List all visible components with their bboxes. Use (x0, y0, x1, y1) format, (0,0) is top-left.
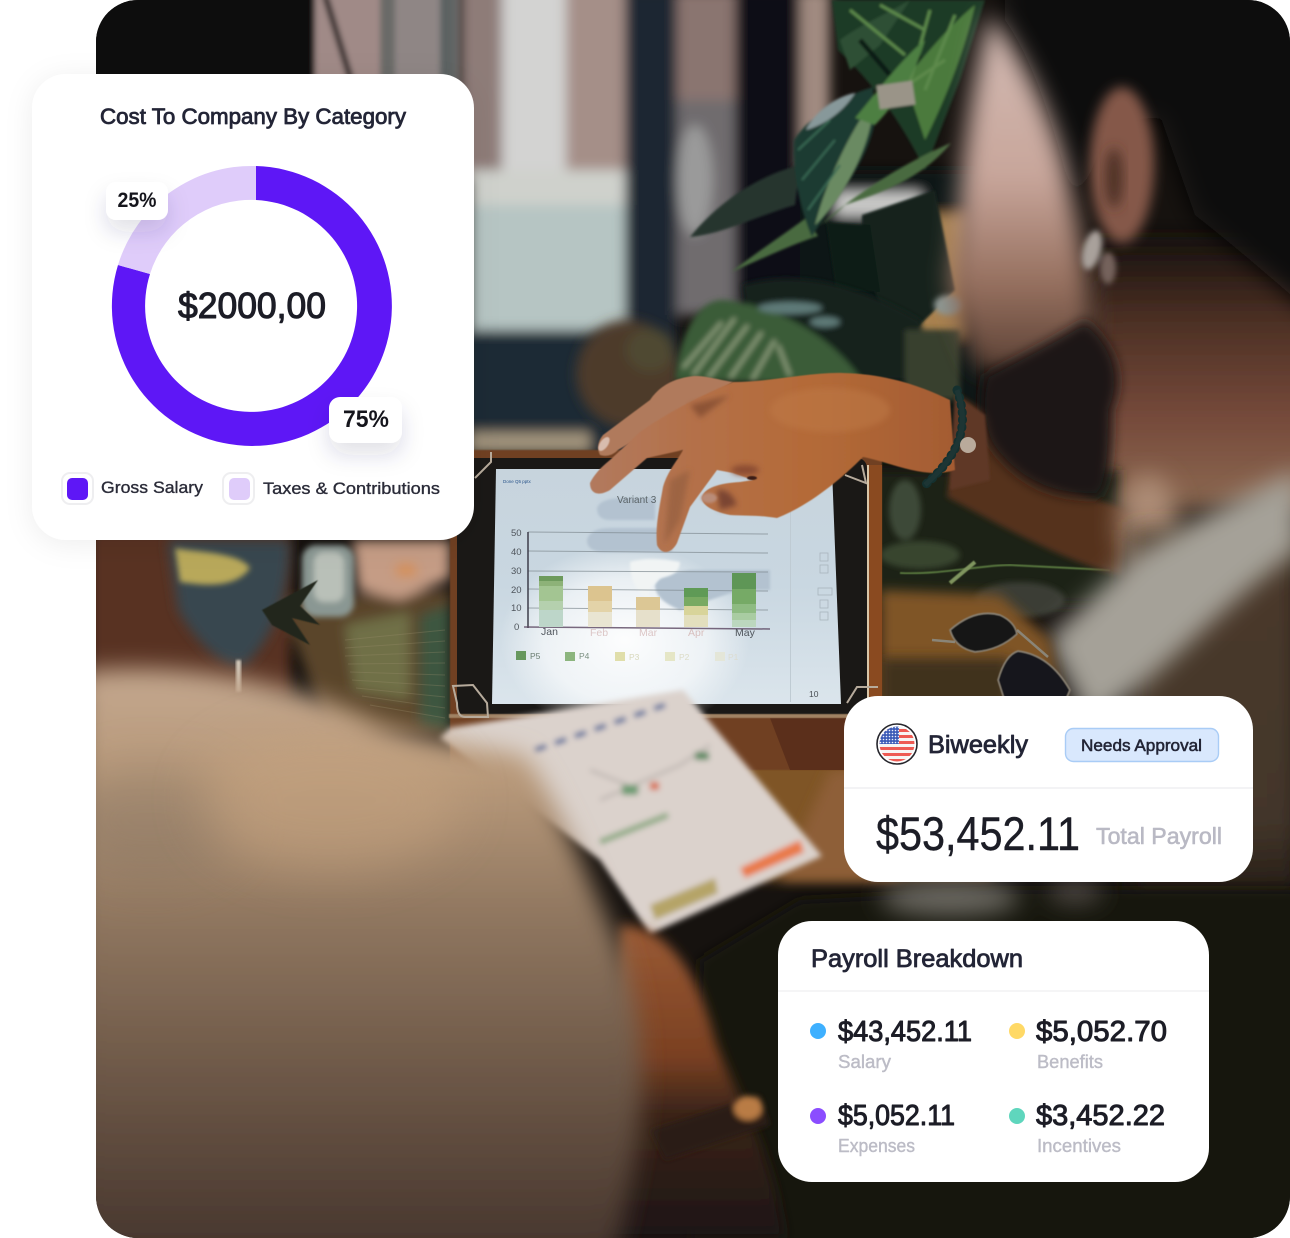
paper (440, 690, 822, 934)
screen chart gridlines (528, 532, 768, 610)
bracelet (925, 390, 963, 485)
status pill: needs approval: Needs Approval (1081, 736, 1202, 755)
item: benefits: Benefits (1037, 1052, 1103, 1072)
screen chart bars (539, 573, 756, 627)
tablet corner clips (453, 452, 878, 717)
item: benefits (1009, 1016, 1167, 1072)
screen chart labels: P1 (728, 652, 739, 662)
donut chart: $2000,00 (178, 285, 326, 326)
tablet screen (492, 469, 841, 735)
wine glass (168, 540, 290, 666)
face (950, 15, 1091, 371)
window background (90, 0, 980, 460)
screen chart labels: P4 (579, 651, 590, 661)
wrist behind bracelet (950, 395, 990, 490)
screen chart labels: 0 (514, 622, 519, 633)
rear finger (598, 376, 733, 456)
donut chart (112, 166, 392, 446)
throat (1118, 475, 1178, 575)
panel: cost to company card (32, 74, 474, 540)
hair (1005, 0, 1290, 320)
lower dark right (1122, 886, 1290, 1238)
heading: cost to company: Cost To Company By Category (100, 104, 406, 129)
text: biweekly: Biweekly (928, 731, 1028, 759)
foreground arm (612, 918, 780, 1234)
badge: 25%: 25% (118, 189, 157, 212)
left table (90, 530, 450, 735)
legend: gross salary: Gross Salary (101, 478, 204, 497)
plant (690, 0, 985, 335)
small glass (302, 545, 354, 617)
screen chart labels: Mar (639, 627, 658, 639)
plant under arm (870, 470, 1120, 618)
item: incentives: $3,452.22 (1036, 1100, 1165, 1132)
item: benefits: $5,052.70 (1036, 1016, 1167, 1048)
legend: taxes and contributions (223, 473, 440, 504)
screen chart labels: May (735, 627, 756, 639)
screen chart labels: Jan (541, 626, 558, 638)
screen chart labels: 10 (809, 689, 819, 699)
label: total payroll: Total Payroll (1096, 823, 1222, 849)
item: salary: Salary (838, 1052, 891, 1072)
item: salary (810, 1016, 972, 1072)
badge: 75% (329, 397, 402, 443)
fingernails (598, 436, 610, 452)
screen chart labels: 50 (511, 528, 522, 539)
icon: US flag (877, 724, 917, 764)
screen chart labels: P5 (530, 651, 541, 661)
hand and fingers (590, 373, 955, 552)
screen chart labels: 40 (511, 547, 522, 558)
forearm of man (947, 395, 1130, 575)
legend: taxes and contributions: Taxes & Contributions (263, 479, 440, 498)
wood grain (345, 630, 445, 718)
shirt right (1047, 470, 1290, 725)
shirt shadow (1130, 530, 1290, 895)
badge: 75%: 75% (343, 406, 389, 433)
screen chart labels: Apr (688, 627, 705, 639)
screen chart labels: 20 (511, 585, 522, 596)
man head (950, 0, 1290, 510)
item: salary: $43,452.11 (838, 1016, 972, 1048)
item: expenses: $5,052.11 (838, 1100, 955, 1132)
beard (981, 320, 1118, 497)
screen chart labels: Variant 3 (617, 495, 657, 506)
cactus (576, 320, 680, 428)
item: incentives (1009, 1100, 1165, 1156)
value: total payroll amount: $53,452.11 (876, 807, 1080, 860)
screen chart labels (503, 479, 819, 699)
tablet leather case (449, 450, 882, 770)
foreground person body (70, 669, 642, 1238)
item: expenses (810, 1100, 955, 1156)
fern (262, 580, 320, 645)
screen chart labels: P3 (629, 652, 640, 662)
status pill: needs approval (1066, 728, 1218, 762)
heading: payroll breakdown: Payroll Breakdown (811, 945, 1023, 973)
panel: total payroll card (844, 696, 1253, 882)
legend: gross salary (62, 473, 204, 504)
table right wood (710, 590, 1060, 880)
badge: 25% (106, 182, 168, 220)
screen chart labels: P2 (679, 652, 690, 662)
sunglasses (932, 613, 1070, 702)
neck (1090, 240, 1290, 510)
earring (1078, 228, 1116, 284)
grey highlight under card (880, 880, 1103, 916)
item: expenses: Expenses (838, 1136, 915, 1156)
hand shading (664, 388, 890, 545)
ear (1090, 87, 1154, 243)
screen chart labels: 10 (511, 603, 522, 614)
watch (650, 1095, 770, 1160)
panel: payroll breakdown card (778, 921, 1209, 1182)
man hand (590, 373, 990, 552)
screen chart labels: Done Q5 pptx (503, 479, 532, 484)
item: incentives: Incentives (1037, 1136, 1121, 1156)
screen chart labels: 30 (511, 566, 522, 577)
screen chart labels: Feb (590, 627, 608, 639)
